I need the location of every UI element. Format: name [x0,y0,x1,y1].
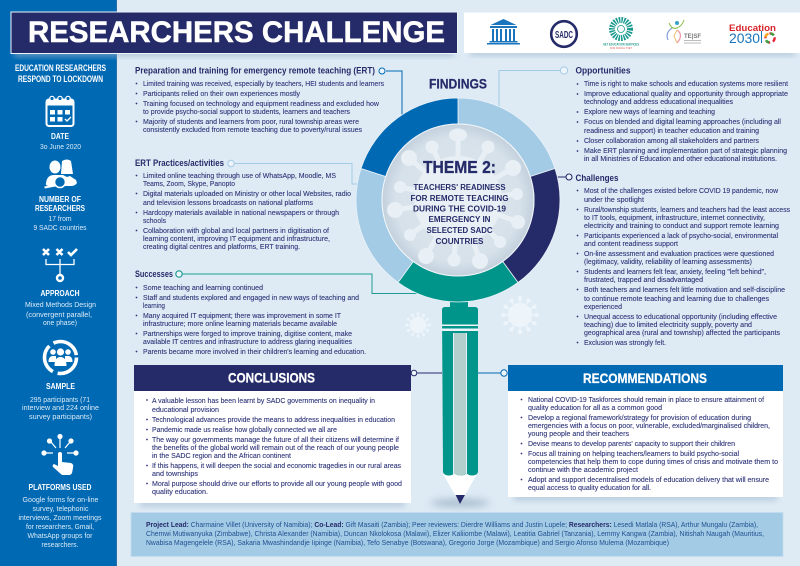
panel: challenges: electricity and training to conduct and support remote learning [584,221,779,230]
ring segment: preparation [361,98,458,176]
panel: recommendations: quality education for all as a common good [528,403,662,412]
panel: preparation and training: Participants relied on their own experiences mostly [143,89,300,98]
panel: challenges: Participants experienced a lack of psycho-social, environmental [584,231,778,240]
panel: challenges: Unequal access to educational opportunity (including effective [584,312,777,321]
panel: recommendations [508,365,783,501]
icon: virus watermark [387,128,525,269]
panel: challenges: On-line assessment and evaluation practices were questioned [584,249,774,258]
panel: recommendations: Develop a regional framework/strategy for provision of education during [528,413,751,422]
logo: Education 2030: 2030 [729,31,760,46]
logo: Education 2030: Education [729,23,776,34]
logo: SET education services [603,20,639,50]
panel: ERT practices: learning content, improving IT equipment and infrastructure, [143,234,330,243]
platforms block: PLATFORMS USED [28,483,92,492]
title band: RESEARCHERS CHALLENGE [28,16,445,49]
sidebar heading: RESPOND TO LOCKDOWN [18,74,103,84]
panel: challenges: Challenges [576,173,618,183]
theme subtitle: EMERGENCY IN [428,214,490,224]
pencil tip [443,474,477,504]
left sidebar [0,0,117,566]
number of researchers block: 17 from [48,214,72,223]
panel: conclusions: Technological advances provide the means to address inequalities in education [152,415,395,424]
sample block: 295 participants (71 [30,395,90,404]
pencil handle [430,298,490,507]
approach block: one phase) [43,318,77,327]
panel: conclusions: The way our governments manage the future of all their citizens will determine if [152,435,400,444]
panel: recommendations: Devise means to develop parents' capacity to support their children [528,439,735,448]
sample block: SAMPLE [46,382,76,391]
panel: challenges: experienced [584,302,622,311]
icon: sample [44,342,76,374]
icon: virus large [501,296,539,334]
theme subtitle: TEACHERS' READINESS [414,182,506,192]
platforms block: researchers. [42,540,78,549]
credits panel: Nwabisa Magengelele (RSA), Sakaria Mwashindandje Iipinge (Namibia), Tefo Senabye (Botswana), Gregorio Jorge (Mozambique) and Sergio Afonso Mulema (Mozambique) [146,538,669,547]
panel: opportunities [576,66,789,163]
panel: successes: available IT centres and infrastructure to address glaring inequalities [143,337,352,346]
panel: recommendations: equal access to quality education for all. [528,483,651,492]
panel: conclusions: in the SADC region and the African continent [152,451,292,460]
platforms block: Google forms for on-line [22,495,98,504]
panel: ERT practices: Digital materials uploaded on Ministry or other local Websites, radio [143,189,351,198]
approach block: APPROACH [40,289,80,298]
recommendations header: RECOMMENDATIONS [583,371,707,386]
panel: challenges [576,173,790,347]
panel: successes: Parents became more involved in their children's learning and education. [143,347,366,356]
panel: opportunities: technology and address educational inequalities [584,97,733,106]
approach block [25,289,96,327]
sample block: interview and 224 online [22,403,99,412]
approach block: Mixed Methods Design [25,300,96,309]
panel: ERT practices: Teams, Zoom, Skype, Panopto [143,179,235,188]
logo: TEISF [667,20,701,44]
panel: recommendations: Focus all training on helping teachers/learners to build psycho-social [528,449,739,458]
platforms block: WhatsApp groups for [28,531,93,540]
panel: preparation and training: Training focused on technology and equipment readiness and excluded how [143,99,379,108]
sidebar heading: EDUCATION RESEARCHERS [15,63,106,73]
panel: challenges: to IT tools, equipment, infrastructure, internet connectivity, [584,213,765,222]
panel: challenges: under the spotlight [584,195,645,204]
date block: DATE [51,132,70,141]
panel: conclusions: Moral purpose should drive our efforts to provide all our young people with good [152,479,402,488]
theme subtitle: DURING THE COVID-19 [413,204,506,214]
number of researchers block [34,195,87,232]
logo: TEISF: TE|SF [684,33,701,40]
panel: ERT practices: ERT Practices/activities [135,158,224,168]
ring segment: practices [356,168,413,282]
panel: challenges: geographical area (rural and township) affected the participants [584,328,780,337]
panel: opportunities: Explore new ways of learning and teaching [584,107,715,116]
panel: successes: Many acquired IT equipment; there was improvement in some IT [143,311,341,320]
panel: successes: Successes [135,269,173,279]
icon: virus small [405,312,431,338]
panel: conclusions: quality education. [152,487,208,496]
panel: successes: infrastructure; more online learning materials became available [143,319,337,328]
panel: conclusions: A valuable lesson has been learnt by SADC governments on inequality in [152,396,375,405]
panel: recommendations: National COVID-19 Taskforces should remain in place to ensure attainment of [528,395,765,404]
approach block: (convergent parallel, [26,310,92,319]
connector: conclusions [411,370,442,376]
pencil body [442,307,478,476]
panel: ERT practices: Collaboration with global and local partners in digitisation of [143,226,330,235]
panel: opportunities: Opportunities [576,66,630,76]
theme subtitle: COUNTRIES [436,236,484,246]
panel: preparation and training: to provide psycho-social support to students, learners and teachers [143,107,350,116]
panel: challenges: and content readiness support [584,239,679,248]
panel: conclusions: the benefits of the global world will remain out of the reach of our young people [152,443,399,452]
logo: SADC [551,21,577,47]
title band [11,12,458,57]
panel: opportunities: Improve educational quality and opportunity through appropriate [584,89,788,98]
panel: successes: Staff and students explored and engaged in new ways of teaching and [143,293,359,302]
platforms block: interviews, Zoom meetings [18,513,102,522]
panel: ERT practices [135,158,351,251]
centre disc [382,124,534,276]
icon: calendar [46,96,74,126]
icon: approach [43,249,77,281]
sample block: survey participants) [29,412,92,421]
panel: opportunities: in all Ministries of Education and other educational institutions. [584,154,777,163]
panel: opportunities: Focus on blended and digital learning approaches (including all [584,117,781,126]
connector: ERT practices [228,160,362,184]
panel: recommendations: Adopt and support decentralised models of education delivery that will ensure [528,475,769,484]
panel: conclusions: and townships [152,469,198,478]
platforms block [18,483,102,549]
panel: preparation and training: Limited training was received, especially by teachers, HEI students and learners [143,79,384,88]
panel: preparation and training: Preparation and training for emergency remote teaching (ERT) [135,66,375,76]
panel: successes: learning [143,301,165,310]
credits panel [131,512,783,556]
logo band [464,12,800,56]
panel: opportunities: Closer collaboration among all stakeholders and partners [584,136,759,145]
date block: 3o June 2020 [40,142,81,151]
findings ring [356,98,560,302]
connector: successes [176,271,420,294]
panel: challenges: teaching) due to limited electricity supply, poverty and [584,320,752,329]
sample block [22,382,99,421]
panel: ERT practices: Hardcopy materials available in national newspapers or through [143,208,339,217]
panel: recommendations: emergencies with a focus on poor, vulnerable, excluded/marginalised children, [528,421,770,430]
number of researchers block: NUMBER OF [39,195,81,204]
conclusions header [134,365,411,391]
ring segment: challenges [503,168,560,282]
theme subtitle: FOR REMOTE TEACHING [410,193,509,203]
panel: challenges: to continue remote teaching and learning due to challenges [584,294,769,303]
panel: opportunities: readiness and support) in teacher education and training [584,126,759,135]
platforms block: survey, telephonic [32,504,89,513]
panel: recommendations: young people and their teachers [528,429,629,438]
panel: challenges: Students and learners felt fear, anxiety, feeling "left behind", [584,267,766,276]
panel: challenges: frustrated, trapped and disadvantaged [584,275,703,284]
connector: opportunities [499,67,568,110]
number of researchers block: RESEARCHERS [35,204,86,213]
sidebar heading [15,63,106,84]
panel: recommendations: competencies that help them to cope during times of crisis and motivate them to [528,457,778,466]
panel: preparation and training: Majority of students and learners from poor, rural township areas were [143,117,359,126]
logo: SET education services: SET EDUCATION SERVICES [603,42,639,46]
panel: successes: Some teaching and learning continued [143,283,263,292]
panel: challenges: (legitimacy, validity, reliability of learning assessments) [584,257,752,266]
panel: ERT practices: schools [143,216,166,225]
panel: successes: Partnerships were forged to improve training, digitise content, make [143,329,352,338]
number of researchers block: 9 SADC countries [34,223,87,232]
credits panel: Project Lead: Charmaine Villet (University of Namibia); Co-Lead: Gift Masaiti (Zambia); Peer reviewers: Dierdre Williams and Justin Lupele; Researchers: Lesedi Matlala (RSA), Arthur Mungalu (Zambia), [146,520,758,529]
date block [40,132,81,151]
panel: conclusions [134,365,411,507]
platforms block: for researchers, Gmail, [26,522,94,531]
connector: challenges [555,174,572,180]
panel: successes [135,269,366,356]
ring segment: opportunities [458,98,555,176]
ring segment: successes [398,262,518,302]
panel: ERT practices: and television lessons broadcasts on national platforms [143,198,313,207]
panel: preparation and training [135,66,384,134]
theme title: THEME 2: [423,157,496,177]
panel: challenges: Exclusion was strongly felt. [584,338,666,347]
panel: conclusions: educational provision [152,405,219,414]
panel: preparation and training: consistently excluded from remote teaching due to poverty/rural issues [143,125,362,134]
panel: ERT practices: creating digital centres and platforms, ERT training. [143,242,300,251]
panel: conclusions: If this happens, it will deepen the social and economic tragedies in our rural areas [152,461,401,470]
logo: SADC: SADC [555,29,573,41]
heading: findings: FINDINGS [429,76,487,92]
recommendations header [508,365,783,391]
panel: ERT practices: Limited online teaching through use of WhatsApp, Moodle, MS [143,171,336,180]
panel: challenges: Most of the challenges existed before COVID 19 pandemic, now [584,186,778,195]
theme subtitle [410,182,509,246]
theme subtitle: SELECTED SADC [426,225,492,235]
credits panel: Chemwi Mutiwanyuka (Zimbabwe), Christa Alexander (Namibia), Duncan Nkolokosa (Malawi), Elizer Kaliiombe (Malawi), Leatitia Gabriel (Tanzania), Lemmy Kangwa (Zambia), Nitishah Naugah (Mauritius, [146,529,764,538]
panel: conclusions: Pandemic made us realise how globally connected we all are [152,425,337,434]
logo: UNESCO [487,19,520,44]
logo: Education 2030 [729,23,776,46]
icon: platforms hand [41,434,79,475]
icon: researchers [44,160,77,188]
connector: preparation [379,68,402,132]
connector: recommendations [478,370,507,376]
panel: recommendations: continue with the academic project [528,465,639,474]
panel: challenges: Both teachers and learners felt little motivation and self-discipline [584,285,785,294]
logo: SET education services: FOR SOCIAL TVET [610,46,632,50]
conclusions header: CONCLUSIONS [228,370,315,386]
